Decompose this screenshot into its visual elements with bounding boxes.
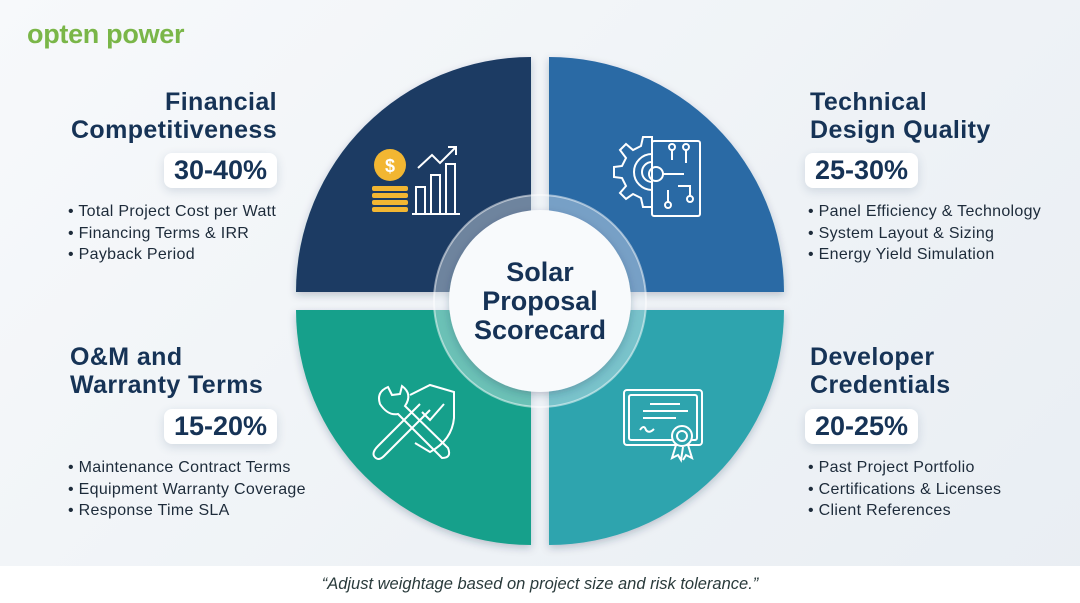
center badge: [449, 210, 631, 392]
icon: coins and chart: [372, 147, 460, 214]
center badge: Solar: [506, 257, 574, 287]
icon: coins and chart: $: [385, 156, 395, 176]
heading: O&M: O&M and: [70, 343, 183, 371]
bullets: developer: • Certifications & Licenses: [808, 480, 1001, 498]
percent: developer: 20-25%: [815, 411, 908, 441]
footer quote: [0, 566, 1080, 603]
bullets: developer: [808, 459, 1001, 519]
heading: developer: Developer: [810, 343, 934, 371]
bullets: O&M: [68, 459, 306, 519]
bullets: developer: • Past Project Portfolio: [808, 459, 975, 476]
icon: gear circuit: [614, 137, 700, 216]
heading: O&M: [70, 343, 263, 399]
heading: developer: Credentials: [810, 371, 951, 399]
heading: financial: Competitiveness: [71, 116, 277, 144]
bullets: O&M: • Maintenance Contract Terms: [68, 459, 291, 476]
icon: wrench and shield: [374, 385, 454, 459]
bullets: O&M: • Response Time SLA: [68, 502, 230, 519]
bullets: technical: • Panel Efficiency & Technology: [808, 203, 1041, 220]
bullets: technical: • Energy Yield Simulation: [808, 246, 995, 263]
bullets: technical: [808, 203, 1041, 263]
heading: financial: [71, 88, 277, 144]
center ring: [434, 195, 646, 407]
center badge: Proposal: [482, 286, 598, 316]
heading: O&M: Warranty Terms: [70, 371, 263, 399]
quadrant: developer: [549, 310, 784, 545]
percent: O&M: 15-20%: [174, 411, 267, 441]
bullets: developer: • Client References: [808, 502, 951, 519]
heading: technical: Technical: [810, 88, 927, 116]
percent: technical: 25-30%: [815, 155, 908, 185]
icon: certificate: [624, 390, 702, 460]
percent: financial: 30-40%: [174, 155, 267, 185]
heading: technical: Design Quality: [810, 116, 991, 144]
footer quote: “Adjust weightage based on project size and risk tolerance.”: [322, 575, 758, 593]
bullets: financial: [68, 203, 276, 263]
bullets: O&M: • Equipment Warranty Coverage: [68, 480, 306, 498]
heading: technical: [810, 88, 991, 144]
bullets: financial: • Payback Period: [68, 246, 195, 263]
quadrant: O&M: [296, 310, 531, 545]
bullets: financial: • Financing Terms & IRR: [68, 224, 249, 242]
bullets: financial: • Total Project Cost per Watt: [68, 203, 276, 220]
center badge: Scorecard: [474, 315, 606, 345]
quadrant: financial: [296, 57, 531, 292]
heading: developer: [810, 343, 951, 399]
quadrant: technical: [549, 57, 784, 292]
logo: opten power: [27, 19, 184, 49]
bullets: technical: • System Layout & Sizing: [808, 224, 994, 242]
heading: financial: Financial: [165, 88, 277, 116]
